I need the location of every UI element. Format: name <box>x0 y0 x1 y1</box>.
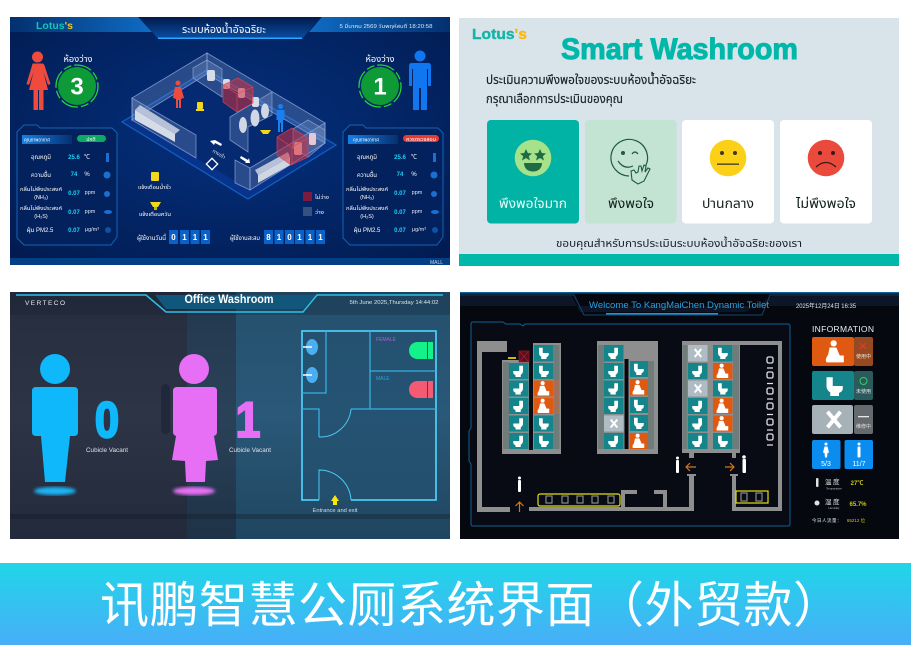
total users counter <box>230 230 325 244</box>
female status <box>172 354 271 495</box>
panel: right environment card: กลิ่นไม่พึงประสงค์ <box>346 204 388 212</box>
panel: right environment card: 74 <box>397 172 404 178</box>
isometric floor plan: ทางเข้า <box>211 148 227 161</box>
option: neutral <box>682 120 774 224</box>
panel: right environment card: ℃ <box>411 154 417 161</box>
accessible rooms <box>538 491 768 506</box>
panel: left environment card: กลิ่นไม่พึงประสงค์ <box>20 185 62 193</box>
panel: right environment card: 0.07 <box>394 191 406 197</box>
header bar <box>460 295 899 315</box>
panel: right environment card: อุณหภูมิ <box>357 154 377 162</box>
entrance markers <box>516 455 746 512</box>
panel: left environment card: 0.07 <box>68 191 80 197</box>
panel: left environment card: ppm <box>85 190 96 196</box>
humidity: 湿度 <box>825 497 841 506</box>
daily users counter <box>137 230 210 244</box>
daily users counter: ผู้ใช้งานวันนี้ <box>137 233 166 242</box>
date and time: 5th June 2025,Thursday 14:44:02 <box>350 300 438 306</box>
label and stall: female: FEMALE <box>376 337 397 343</box>
panel: left environment card: 25.6 <box>68 155 80 161</box>
legend: under repair <box>812 405 873 434</box>
panel: right environment card: 0.07 <box>394 210 406 216</box>
panel: Smart Washroom survey <box>459 18 899 266</box>
male status: 0 <box>95 392 119 448</box>
heading: welcome: Welcome To KangMaiChen Dynamic Toilet <box>589 300 769 311</box>
humidity: 65.7% <box>849 502 867 508</box>
temperature: 温度 <box>825 477 841 486</box>
panel: left environment card: คุณภาพอากาศ <box>24 138 50 144</box>
legend: occupied <box>812 337 873 366</box>
panel: right environment card: ฝุ่น PM2.5 <box>354 226 381 234</box>
floor plan: Entrance and exit <box>312 508 358 514</box>
female availability <box>812 440 840 469</box>
panel: right environment card: μg/m³ <box>412 227 426 233</box>
panel: right environment card <box>343 125 443 245</box>
footer band <box>459 254 899 266</box>
daily visitors: 今日人流量： <box>812 517 842 524</box>
daily users counter: 1 <box>203 233 208 242</box>
panel: right environment card: ppm <box>412 190 423 196</box>
panel: right environment card: คุณภาพอากาศ <box>353 138 379 144</box>
panel: left environment card <box>17 125 117 245</box>
vacant count male: 1 <box>373 74 387 100</box>
stall column 3 <box>598 345 628 449</box>
brand: VERTECO: VERTECO <box>25 300 65 307</box>
legend: occupied: 使用中 <box>856 353 871 360</box>
isometric floor plan <box>122 53 336 199</box>
total users counter: 8 <box>266 233 271 242</box>
female status: Cubicle Vacant <box>229 447 271 454</box>
panel: right environment card: 25.6 <box>394 155 406 161</box>
female availability: 5/3 <box>821 461 831 468</box>
icon: male figure <box>409 50 431 110</box>
female status: 1 <box>236 392 260 448</box>
option: very satisfied: พึงพอใจมาก <box>499 196 567 211</box>
panel: right environment card: ควรตรวจสอบ <box>406 137 436 143</box>
stall column 2 <box>534 345 560 449</box>
footer banner <box>0 563 911 645</box>
heading: Office Washroom: Office Washroom <box>184 292 274 306</box>
blocked stall marker <box>508 351 529 362</box>
option: dissatisfied <box>780 120 872 224</box>
panel: left environment card: % <box>84 172 90 178</box>
panel: Office Washroom <box>10 292 450 539</box>
total users counter: ผู้ใช้งานสะสม <box>230 234 260 242</box>
panel: right environment card: (H₂S) <box>360 214 374 220</box>
legend: available <box>812 371 873 400</box>
panel: right environment card: ความชื้น <box>357 170 377 179</box>
panel: left environment card: ปกติ <box>86 137 96 143</box>
sinks <box>303 339 318 383</box>
legend: under repair: 维修中 <box>856 423 871 430</box>
panel: Lotus's washroom status dashboard <box>10 17 450 266</box>
panel: left environment card: ฝุ่น PM2.5 <box>27 226 54 234</box>
total users counter: 1 <box>277 233 282 242</box>
panel: left environment card: ความชื้น <box>31 170 51 179</box>
legend: ว่าง <box>315 209 324 216</box>
dashboard title: ระบบห้องน้ำอัจฉริยะ <box>182 22 266 36</box>
survey instructions: ประเมินความพึงพอใจของระบบห้องน้ำอัจฉริยะ <box>486 71 696 87</box>
panel: KangMaiChen Dynamic Toilet <box>460 292 899 539</box>
alarm icons and labels <box>138 172 171 218</box>
temperature <box>816 477 863 490</box>
humidity <box>814 497 867 510</box>
option: satisfied <box>585 120 676 224</box>
panel: left environment card: 0.07 <box>68 228 80 234</box>
floor map walls <box>477 341 782 512</box>
daily users counter: 1 <box>182 233 187 242</box>
male availability <box>844 440 873 469</box>
panel: right environment card: (NH₃) <box>360 195 374 201</box>
panel: left environment card: (H₂S) <box>34 214 48 220</box>
urinal row <box>767 357 773 445</box>
stall grid <box>503 345 739 449</box>
icon: female figure <box>172 354 218 482</box>
legend: ไม่ว่าง <box>314 194 329 201</box>
survey instructions: กรุณาเลือกการประเมินของคุณ <box>486 92 623 106</box>
temperature: Temperature <box>826 486 842 490</box>
date and time: 2025年12月24日 16:35 <box>796 302 857 310</box>
option: neutral: ปานกลาง <box>702 196 754 211</box>
total users counter: 0 <box>287 233 292 242</box>
total users counter: 1 <box>308 233 313 242</box>
label and stall: male: MALE <box>376 376 390 382</box>
vacant count male: ห้องว่าง <box>366 54 395 64</box>
panel: right environment card: ppm <box>412 209 423 215</box>
male status: Cubicle Vacant <box>86 447 128 454</box>
heading: information: INFORMATION <box>812 324 874 334</box>
panel: left environment card: 74 <box>71 172 78 178</box>
vacant count female: ห้องว่าง <box>64 54 93 64</box>
floor plan <box>302 331 436 514</box>
legend <box>303 192 329 216</box>
vacant count female: 3 <box>70 74 84 100</box>
alarm icons and labels: แจ้งเตือนน้ำรั่ว <box>138 183 171 191</box>
header decoration <box>16 295 443 312</box>
daily users counter: 0 <box>171 233 176 242</box>
total users counter: 1 <box>318 233 323 242</box>
panel: left environment card: (NH₃) <box>34 195 48 201</box>
total users counter: 1 <box>297 233 302 242</box>
humidity: Humidity <box>829 506 840 510</box>
survey instructions <box>486 71 696 106</box>
thank-you message: ขอบคุณสำหรับการประเมินระบบห้องน้ำอัจฉริยะของเรา <box>556 236 802 250</box>
option: dissatisfied: ไม่พึงพอใจ <box>795 196 856 211</box>
vacant count female <box>56 54 98 107</box>
icon: male figure <box>32 354 78 482</box>
panel: right environment card: กลิ่นไม่พึงประสงค์ <box>346 185 388 193</box>
stall column 5 <box>682 345 708 449</box>
label and stall: female <box>376 337 433 359</box>
icon: entrance arrow <box>331 495 339 505</box>
panel: information legend <box>812 324 874 524</box>
male status <box>32 354 128 495</box>
vacant count male <box>359 54 401 107</box>
alarm icons and labels: แจ้งเตือนควัน <box>139 211 171 218</box>
stall column 1 <box>503 362 528 449</box>
option: very satisfied <box>487 120 579 224</box>
panel: right environment card: 0.07 <box>394 228 406 234</box>
legend: available: 未使用 <box>856 388 871 395</box>
banner title: 讯鹏智慧公厕系统界面（外贸款） <box>100 566 842 637</box>
date and time: 5 มีนาคม 2569 วันพฤหัสบดี 18:20:58 <box>340 23 432 30</box>
stall column 6 <box>713 345 739 449</box>
logo: Lotus's: Lotus's <box>472 26 527 43</box>
brand mark: MALL <box>430 260 443 266</box>
map frame <box>469 322 790 526</box>
panel: left environment card: กลิ่นไม่พึงประสงค์ <box>20 204 62 212</box>
panel: left environment card: ppm <box>85 209 96 215</box>
panel: left environment card: ℃ <box>84 154 90 161</box>
daily visitors: 65212 位 <box>847 517 866 523</box>
logo: Lotus's: Lotus's <box>36 20 73 32</box>
male availability: 11/7 <box>852 461 866 468</box>
daily users counter: 1 <box>193 233 198 242</box>
panel: left environment card: อุณหภูมิ <box>31 154 51 162</box>
icon: female figure <box>26 52 50 110</box>
daily visitors <box>812 517 866 524</box>
temperature: 27℃ <box>851 480 863 487</box>
panel: left environment card: 0.07 <box>68 210 80 216</box>
option: satisfied: พึงพอใจ <box>608 196 654 211</box>
header bar <box>10 17 450 39</box>
panel: right environment card: % <box>411 172 417 178</box>
label and stall: male <box>376 376 433 398</box>
panel: left environment card: μg/m³ <box>85 227 99 233</box>
survey title: Smart Washroom <box>561 33 798 66</box>
stall column 4 <box>630 361 654 449</box>
